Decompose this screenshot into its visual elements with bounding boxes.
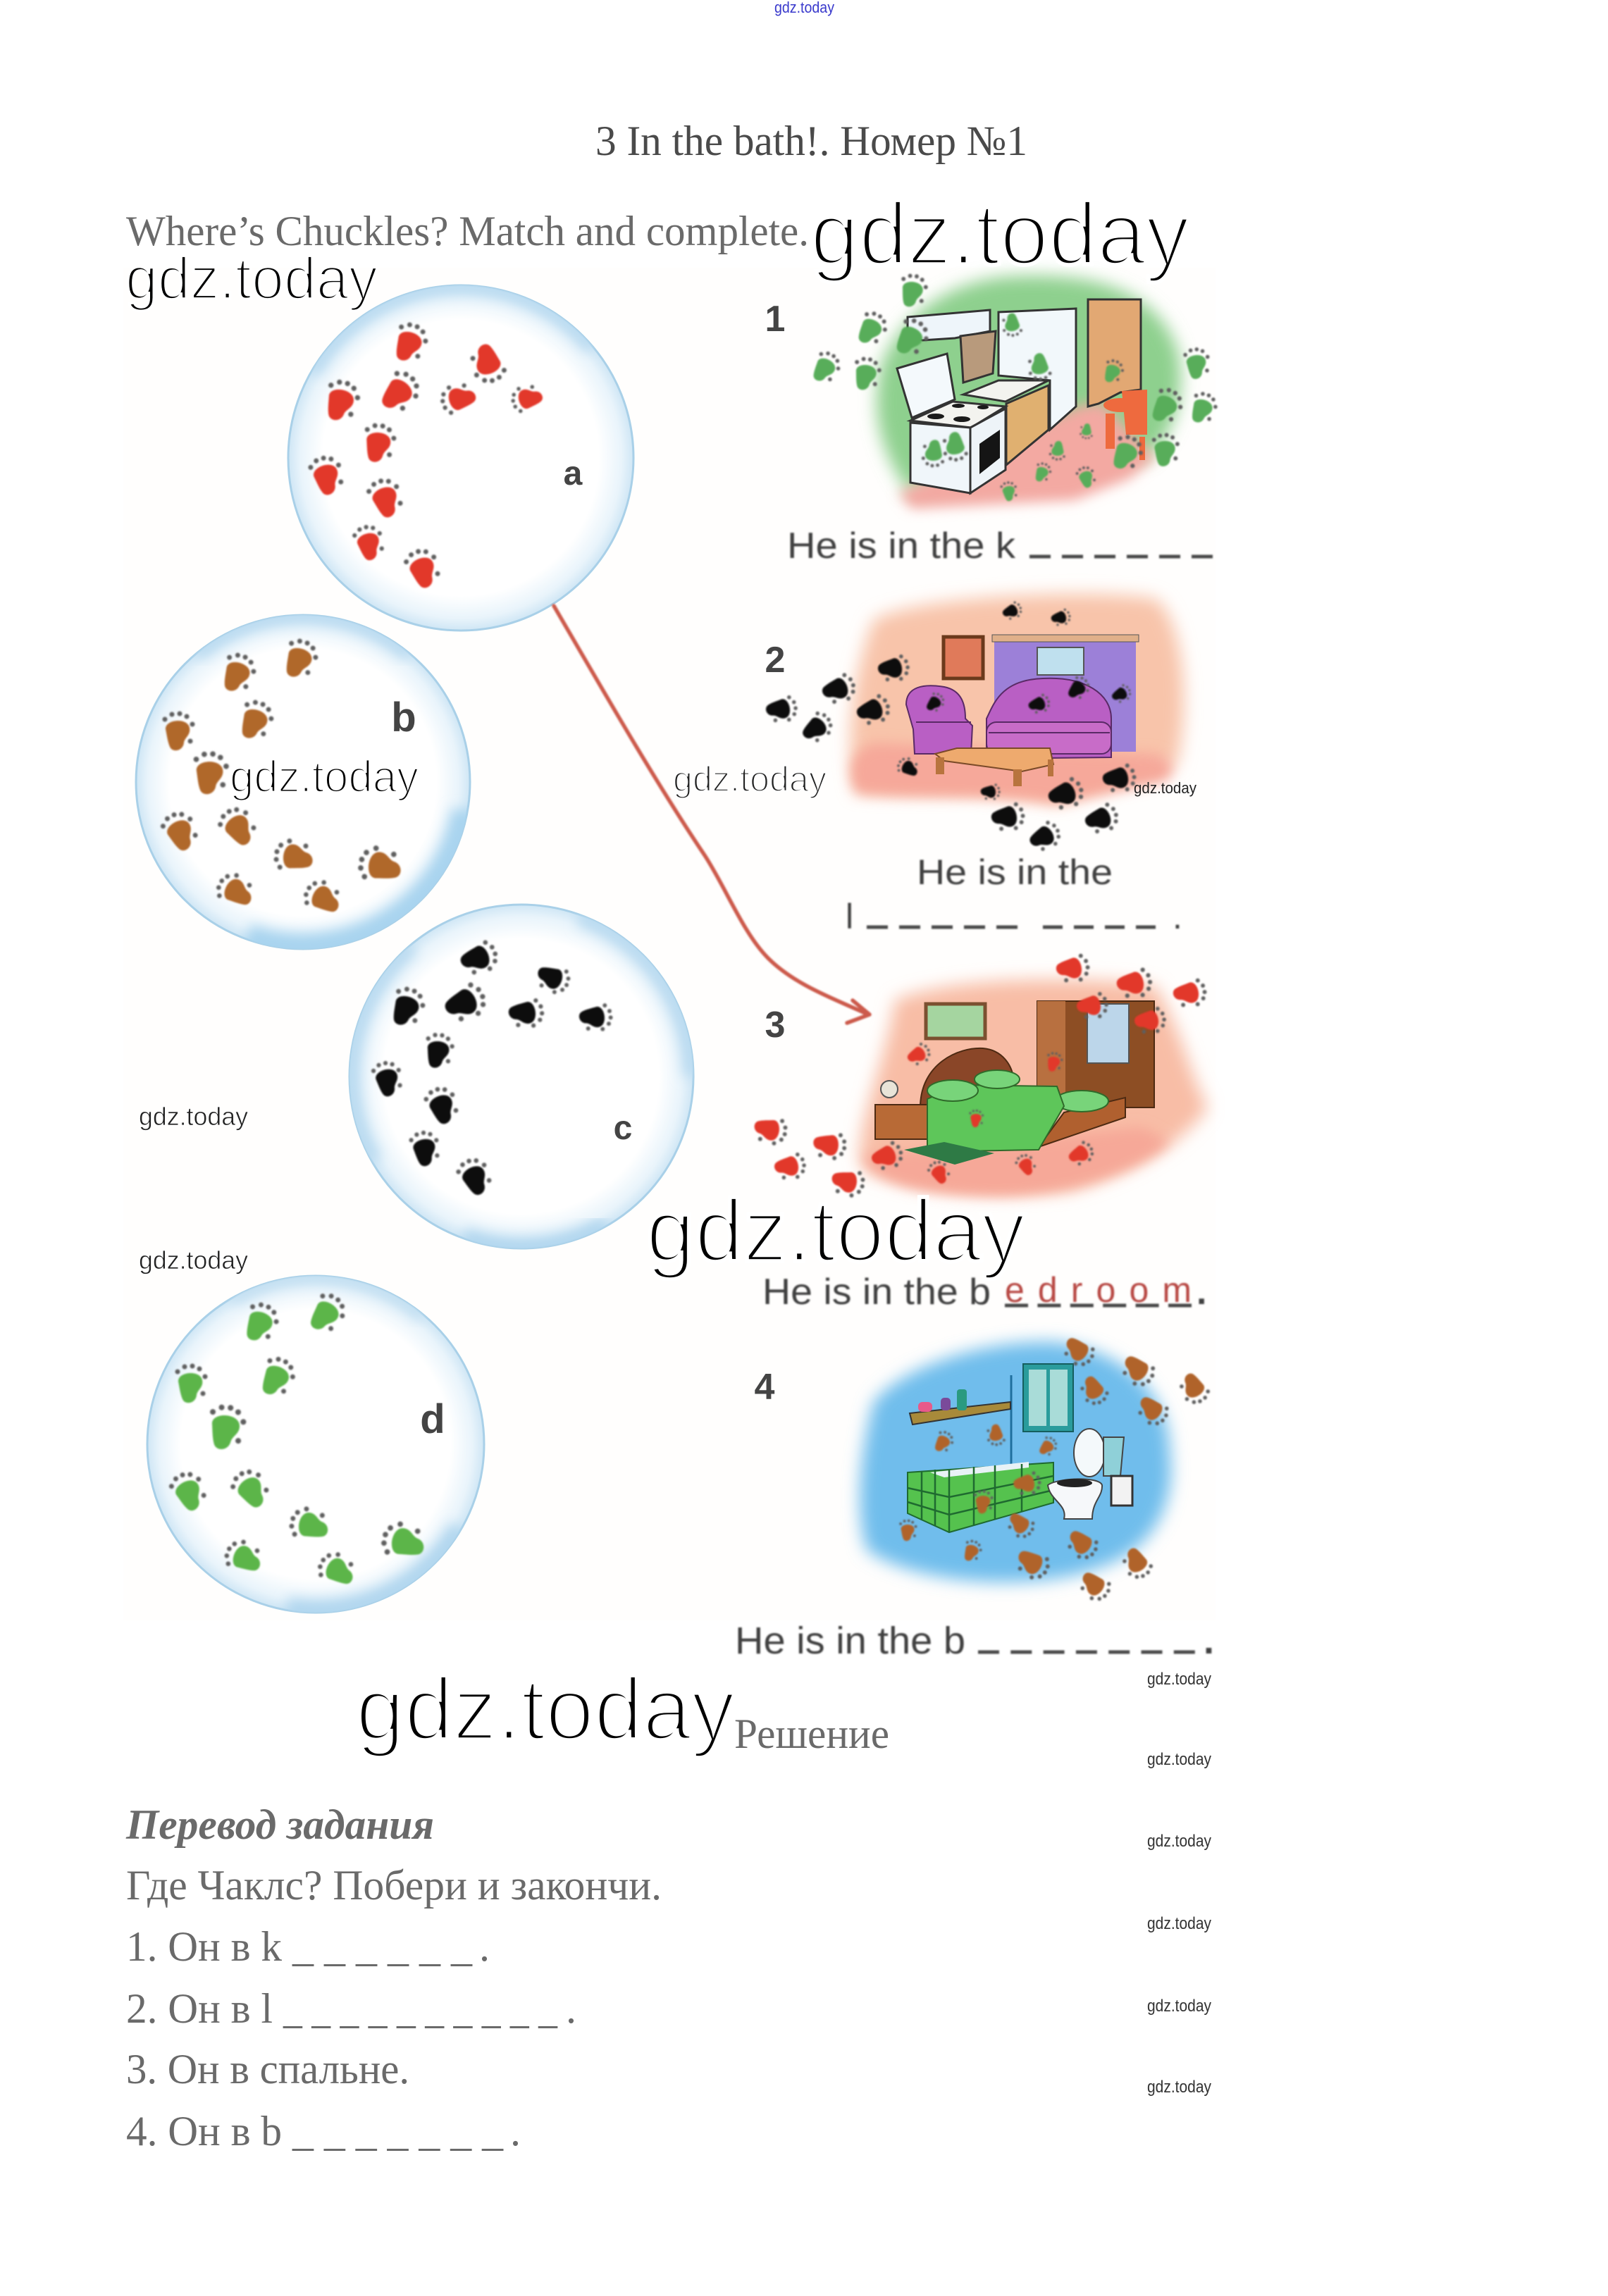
- right column small watermarks: [1147, 1670, 1211, 2097]
- right column small watermarks: gdz.today: [1147, 1750, 1211, 1769]
- sentence 2: [846, 852, 1182, 936]
- watermark: living room small: gdz.today: [1134, 779, 1196, 797]
- sentence 4: .: [1204, 1620, 1214, 1662]
- scene: kitchen: [807, 272, 1221, 509]
- circle a: red footprints: [288, 285, 633, 631]
- translation text: .: [479, 1923, 490, 1970]
- solution heading: Решение: [734, 1711, 889, 1757]
- right column small watermarks: gdz.today: [1147, 1832, 1211, 1851]
- watermark: top right large: gdz.today: [810, 185, 1189, 283]
- circle c: black footprints: [350, 905, 693, 1248]
- sentence 1: He is in the k: [787, 526, 1016, 566]
- watermark: in circle b: gdz.today: [230, 752, 419, 802]
- translation text: .: [510, 2108, 521, 2154]
- right column small watermarks: gdz.today: [1147, 1914, 1211, 1933]
- watermark: left small 2: gdz.today: [139, 1246, 248, 1274]
- watermark: bottom large: gdz.today: [356, 1661, 735, 1758]
- translation text: [126, 1862, 662, 2154]
- arrow: a to 3: [554, 606, 870, 1023]
- translation text: Где Чаклс? Побери и закончи.: [126, 1862, 662, 1909]
- instruction heading: Where’s Chuckles? Match and complete.: [126, 208, 809, 254]
- watermark: middle: gdz.today: [673, 759, 827, 799]
- number 4: 4: [755, 1367, 775, 1408]
- title: 3 In the bath!. Номер №1: [595, 118, 1027, 164]
- right column small watermarks: gdz.today: [1147, 1997, 1211, 2016]
- translation text: 3. Он в спальне.: [126, 2046, 409, 2092]
- watermark: left small 1: gdz.today: [139, 1102, 248, 1131]
- right column small watermarks: gdz.today: [1147, 1670, 1211, 1689]
- image background: [123, 268, 1216, 1620]
- circle b: brown footprints: b: [391, 695, 416, 740]
- translation text: .: [566, 1985, 576, 2032]
- watermark: center large: gdz.today: [646, 1182, 1025, 1280]
- translation text: _ _ _ _ _ _: [292, 1923, 473, 1970]
- watermark: below heading: gdz.today: [125, 245, 378, 311]
- sentence 2: .: [1173, 897, 1182, 936]
- number 2: 2: [765, 640, 785, 681]
- scene: bedroom: [752, 952, 1209, 1199]
- scene: living room: [764, 594, 1184, 856]
- circle c: black footprints: c: [614, 1110, 632, 1147]
- sentence 3: .: [1196, 1272, 1206, 1313]
- scene: bathroom: [860, 1332, 1213, 1606]
- circle d: green footprints: d: [420, 1396, 445, 1442]
- sentence 3: e d r o o m: [1005, 1270, 1192, 1310]
- translation text: 1. Он в k: [126, 1923, 282, 1970]
- right column small watermarks: gdz.today: [1147, 2078, 1211, 2097]
- translation text: 2. Он в l: [126, 1985, 273, 2032]
- translation heading: Перевод задания: [125, 1801, 434, 1848]
- number 3: 3: [765, 1005, 785, 1045]
- translation text: 4. Он в b: [126, 2108, 282, 2154]
- sentence 3: [762, 1270, 1206, 1313]
- circle a: red footprints: a: [564, 455, 583, 492]
- circle b: brown footprints: [136, 615, 470, 949]
- translation text: _ _ _ _ _ _ _: [292, 2108, 504, 2154]
- sentence 4: [735, 1620, 1214, 1662]
- sentence 2: He is in the: [917, 852, 1113, 892]
- circle d: green footprints: [147, 1276, 484, 1613]
- sentence 2: l: [846, 897, 853, 936]
- sentence 4: He is in the b: [735, 1620, 965, 1662]
- number 1: 1: [765, 299, 785, 340]
- translation text: _ _ _ _ _ _ _ _ _ _: [283, 1985, 558, 2032]
- sentence 3: He is in the b: [762, 1272, 991, 1313]
